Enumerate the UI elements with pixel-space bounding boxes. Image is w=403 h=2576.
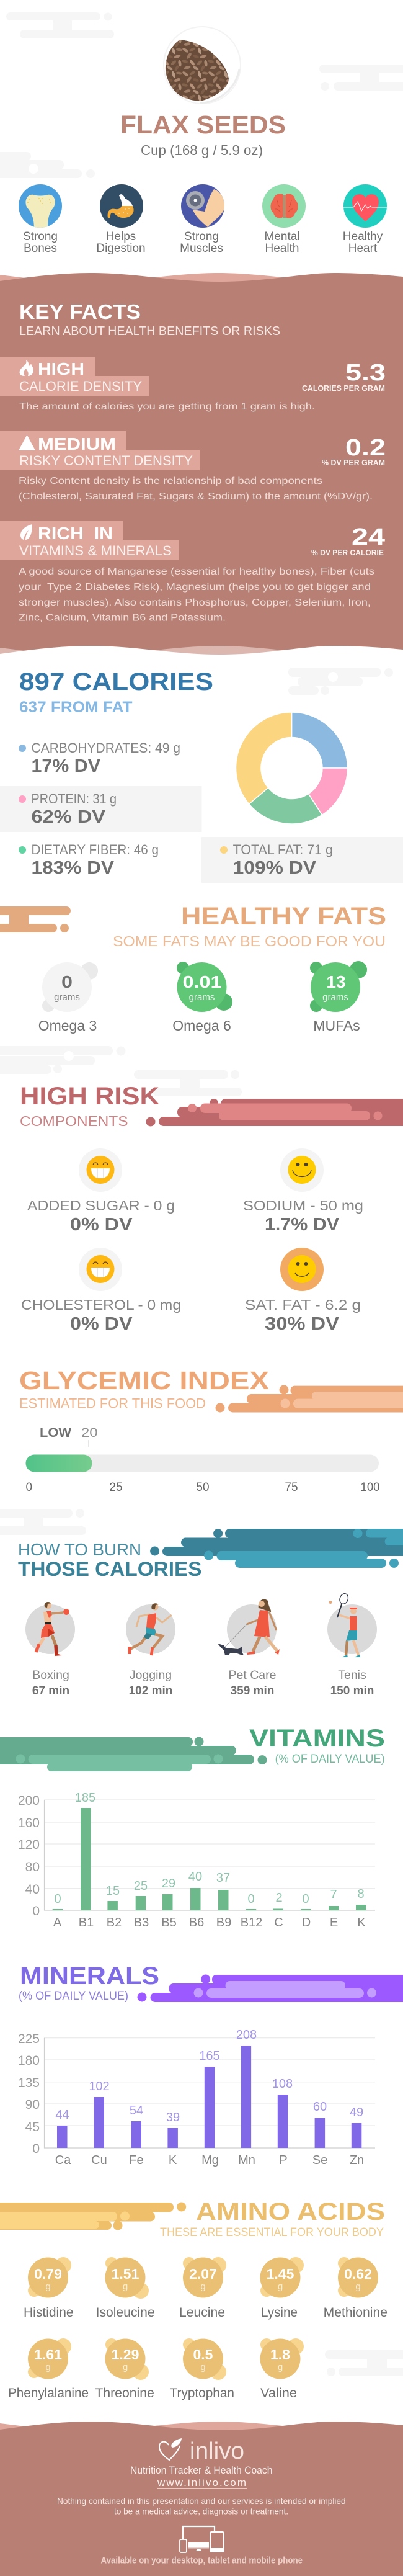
macro: carbohydrates xyxy=(19,740,180,776)
amino: phenylalanine: g xyxy=(45,2362,51,2373)
chart: minerals bar chart: Ca xyxy=(55,2153,71,2167)
chart: vitamins bar chart: C xyxy=(274,1916,283,1930)
chart: minerals bar chart: 0 xyxy=(32,2142,40,2156)
fact: calorie density: HIGH xyxy=(38,359,84,378)
panel: health benefit icons xyxy=(19,184,387,255)
amino: valine: Valine xyxy=(260,2386,297,2400)
amino: lysine: g xyxy=(278,2281,283,2292)
chart: vitamins bar chart: 0 xyxy=(247,1892,255,1906)
chart: vitamins bar chart: 25 xyxy=(134,1879,148,1893)
fact: risky content density: (Cholesterol, Saturated Fat, Sugars & Sodium) to the amount (%DV/gr). xyxy=(19,491,373,502)
amino: threonine: g xyxy=(123,2362,128,2373)
chart: vitamins bar chart: 8 xyxy=(357,1887,365,1901)
chart: vitamins bar chart: B1 xyxy=(79,1916,94,1930)
background cloud: amino xyxy=(325,2350,403,2376)
chart: minerals bar chart xyxy=(18,2028,375,2167)
icon: warning triangle xyxy=(19,435,35,450)
chart: vitamins bar chart: 160 xyxy=(18,1816,40,1830)
subheading: (% OF DAILY VALUE) xyxy=(275,1753,385,1766)
disclaimer: Nothing contained in this presentation and our services is intended or implied xyxy=(57,2496,346,2506)
bubble: omega 3: 0 xyxy=(61,972,73,991)
amino: isoleucine: g xyxy=(123,2281,128,2292)
component: sodium: SODIUM - 50 mg xyxy=(243,1197,363,1214)
fact: risky content density: RISKY CONTENT DENSITY xyxy=(19,453,193,468)
label: helps digestion: Helps xyxy=(106,230,136,243)
activity: tennis xyxy=(327,1593,377,1657)
macro: carbohydrates: 17% DV xyxy=(31,756,101,776)
amino: histidine xyxy=(24,2257,74,2320)
amino: histidine: Histidine xyxy=(24,2305,74,2320)
decoration: amino bars xyxy=(0,2203,186,2230)
chart: vitamins bar chart: 200 xyxy=(18,1794,40,1808)
amino: methionine xyxy=(324,2257,388,2320)
amino: lysine: 1.45 xyxy=(267,2266,294,2282)
icon: flame xyxy=(20,360,33,376)
logo: inlivo xyxy=(159,2438,244,2464)
amino: methionine: 0.62 xyxy=(344,2266,372,2282)
gauge: glycemic scale: 100 xyxy=(361,1481,379,1494)
macro: carbohydrates: CARBOHYDRATES: 49 g xyxy=(31,740,180,756)
label: helps digestion: Digestion xyxy=(96,242,146,255)
fact: rich in vitamins and minerals: 24 xyxy=(352,524,385,550)
panel: key facts xyxy=(0,273,403,655)
background clouds: high risk xyxy=(0,1046,242,1096)
label: healthy heart: Heart xyxy=(348,242,378,255)
label: mental health: Health xyxy=(265,242,299,255)
subtitle: serving size: Cup (168 g / 5.9 oz) xyxy=(141,142,263,158)
amino: isoleucine: 1.51 xyxy=(112,2266,140,2282)
panel: amino acids xyxy=(0,2198,403,2400)
panel: footer xyxy=(0,2422,403,2576)
fact: rich in vitamins and minerals: % DV PER CALORIE xyxy=(311,548,384,557)
fact: rich in vitamins and minerals: A good source of Manganese (essential for healthy bones), Fiber (cuts xyxy=(19,566,374,577)
activity: pet care xyxy=(218,1599,280,1655)
label: healthy heart: Healthy xyxy=(343,230,383,243)
macro: total fat: 109% DV xyxy=(233,858,317,878)
bubble: mufas xyxy=(310,961,367,1034)
chart: vitamins bar chart: 2 xyxy=(275,1891,283,1905)
chart: vitamins bar chart: 40 xyxy=(188,1870,202,1884)
fact: risky content density: 0.2 xyxy=(345,435,386,461)
bubble: mufas: MUFAs xyxy=(313,1017,360,1034)
subheading: LEARN ABOUT HEALTH BENEFITS OR RISKS xyxy=(19,324,280,338)
chart: minerals bar chart: 225 xyxy=(18,2032,40,2046)
label: jogging: Jogging xyxy=(130,1668,172,1682)
macro: dietary fiber xyxy=(19,842,159,878)
bubble: omega 3: Omega 3 xyxy=(38,1017,97,1034)
amino: leucine xyxy=(179,2257,226,2320)
food image: bowl of flax seeds xyxy=(164,27,241,104)
amino: histidine: 0.79 xyxy=(34,2266,62,2282)
chart: vitamins bar chart: B2 xyxy=(107,1916,122,1930)
label: boxing: Boxing xyxy=(32,1668,69,1682)
icon: healthy heart xyxy=(343,184,387,228)
panel: how to burn those calories xyxy=(18,1529,403,1697)
amino: tryptophan: 0.5 xyxy=(193,2346,213,2363)
fact: calorie density: The amount of calories you are getting from 1 gram is high. xyxy=(19,401,315,412)
background clouds: header xyxy=(0,12,403,178)
fact: risky content density: Risky Content density is the relationship of bad components xyxy=(19,476,322,486)
fact: rich in vitamins and minerals: VITAMINS & MINERALS xyxy=(19,543,172,558)
bubble: omega 6: grams xyxy=(189,992,215,1003)
heading: high risk: HIGH RISK xyxy=(20,1083,159,1110)
chart: vitamins bar chart: 185 xyxy=(75,1791,95,1805)
value: jogging minutes: 102 min xyxy=(129,1684,172,1697)
tagline: Nutrition Tracker & Health Coach xyxy=(130,2464,273,2476)
logo: inlivo: inlivo xyxy=(190,2438,244,2464)
icon: digestion xyxy=(100,184,143,228)
chart: minerals bar chart: 39 xyxy=(166,2111,180,2124)
heading: minerals: MINERALS xyxy=(20,1962,159,1990)
chart: vitamins bar chart: B6 xyxy=(189,1916,204,1930)
background cloud: burn xyxy=(0,1509,86,1535)
chart: minerals bar chart: 180 xyxy=(18,2054,40,2068)
macro: dietary fiber: 183% DV xyxy=(31,858,115,878)
chart: vitamins bar chart: B3 xyxy=(134,1916,149,1930)
chart: vitamins bar chart: 29 xyxy=(162,1877,175,1890)
decoration: burn bars xyxy=(150,1529,403,1568)
icon: strong bones xyxy=(19,184,62,228)
amino: lysine: Lysine xyxy=(261,2305,298,2320)
decoration: healthy fats bars xyxy=(0,906,71,932)
label: strong bones: Strong xyxy=(23,230,58,243)
label: strong muscles: Strong xyxy=(184,230,219,243)
chart: vitamins bar chart: 0 xyxy=(32,1904,40,1918)
title: FLAX SEEDS xyxy=(120,110,286,139)
chart: minerals bar chart: Cu xyxy=(91,2153,107,2167)
fact: risky content density xyxy=(0,431,386,502)
label: tennis: Tenis xyxy=(338,1668,366,1682)
chart: minerals bar chart: 60 xyxy=(313,2100,327,2114)
band: protein background xyxy=(0,786,202,832)
chart: vitamins bar chart: B12 xyxy=(241,1916,262,1930)
amino: phenylalanine: Phenylalanine xyxy=(8,2386,89,2400)
panel: high risk components xyxy=(20,1083,403,1334)
panel: glycemic index xyxy=(19,1366,403,1494)
background cloud: calories xyxy=(288,668,393,695)
chart: minerals bar chart: 45 xyxy=(25,2120,40,2134)
component: added sugar: 0% DV xyxy=(70,1215,133,1235)
amino: leucine: Leucine xyxy=(179,2305,225,2320)
component: saturated fat: 30% DV xyxy=(265,1314,340,1334)
chart: macro donut xyxy=(236,712,347,824)
chart: minerals bar chart: 90 xyxy=(25,2098,40,2112)
chart: vitamins bar chart: 0 xyxy=(302,1892,309,1906)
amino: phenylalanine: 1.61 xyxy=(34,2346,62,2363)
chart: vitamins bar chart: 0 xyxy=(54,1892,61,1906)
macro: protein xyxy=(19,791,117,827)
bubble: mufas: grams xyxy=(322,992,348,1003)
subheading: (% OF DAILY VALUE) xyxy=(19,1990,128,2003)
subheading: THESE ARE ESSENTIAL FOR YOUR BODY xyxy=(160,2226,384,2239)
chart: minerals bar chart: Mn xyxy=(238,2153,255,2167)
amino: lysine xyxy=(260,2257,304,2320)
fact: calorie density: 5.3 xyxy=(345,360,386,386)
chart: vitamins bar chart: E xyxy=(330,1916,338,1930)
value: tennis minutes: 150 min xyxy=(330,1684,374,1697)
chart: vitamins bar chart: 37 xyxy=(216,1871,230,1885)
disclaimer: to be a medical advice, diagnosis or treatment. xyxy=(114,2507,288,2516)
amino: valine xyxy=(260,2338,304,2400)
icon: strong muscles xyxy=(181,184,225,228)
panel: minerals xyxy=(18,1962,403,2167)
macro: dietary fiber: DIETARY FIBER: 46 g xyxy=(31,842,159,857)
icon: devices xyxy=(180,2526,224,2552)
heading: amino acids: AMINO ACIDS xyxy=(196,2198,385,2225)
gauge: glycemic scale xyxy=(26,1454,379,1494)
decoration: glycemic bars xyxy=(216,1385,403,1412)
bubble: mufas: 13 xyxy=(326,972,346,991)
amino: leucine: 2.07 xyxy=(189,2266,217,2282)
component: sodium: 1.7% DV xyxy=(265,1215,340,1235)
macro: total fat xyxy=(220,842,333,878)
band: total fat background xyxy=(202,837,403,883)
macro: total fat: TOTAL FAT: 71 g xyxy=(233,842,333,857)
chart: vitamins bar chart: 120 xyxy=(18,1838,40,1852)
bubble: omega 6: Omega 6 xyxy=(172,1017,231,1034)
amino: tryptophan: g xyxy=(200,2362,206,2373)
disclaimer xyxy=(57,2496,346,2516)
component: added sugar: ADDED SUGAR - 0 g xyxy=(27,1197,175,1214)
chart: minerals bar chart: 49 xyxy=(350,2106,363,2119)
label: strong muscles: Muscles xyxy=(180,242,223,255)
macro: protein: PROTEIN: 31 g xyxy=(31,791,117,807)
chart: vitamins bar chart: 7 xyxy=(330,1888,337,1902)
value: boxing minutes: 67 min xyxy=(32,1684,69,1697)
heading: glycemic index: GLYCEMIC INDEX xyxy=(19,1366,269,1395)
amino: leucine: g xyxy=(200,2281,206,2292)
wave: top of key facts xyxy=(0,273,403,292)
label: strong bones: Bones xyxy=(24,242,57,255)
fact: rich in vitamins and minerals xyxy=(0,521,385,623)
website: www.inlivo.com xyxy=(157,2477,246,2489)
chart: minerals bar chart: 54 xyxy=(130,2104,143,2118)
component: cholesterol xyxy=(21,1248,181,1334)
fact: rich in vitamins and minerals: Zinc, Calcium, Vitamin B6 and Potassium. xyxy=(19,613,226,623)
amino: tryptophan xyxy=(170,2338,234,2400)
gauge: glycemic scale: 50 xyxy=(196,1481,210,1494)
fact: rich in vitamins and minerals: stronger muscles). Also contains Phosphorus, Copper, Selenium, Iron, xyxy=(19,597,371,608)
fact: rich in vitamins and minerals: your Type 2 Diabetes Risk), Magnesium (helps you to get bigger and xyxy=(19,582,371,593)
chart: vitamins bar chart: B9 xyxy=(216,1916,231,1930)
chart: minerals bar chart: 208 xyxy=(236,2028,257,2042)
heading: how to burn: HOW TO BURN xyxy=(18,1540,141,1559)
amino: histidine: g xyxy=(45,2281,51,2292)
gauge: glycemic scale: 75 xyxy=(285,1481,298,1494)
wave: footer top xyxy=(0,2422,403,2438)
fact: risky content density: % DV PER GRAM xyxy=(322,458,385,467)
gauge: glycemic scale: 0 xyxy=(26,1481,32,1494)
decoration: vitamins bars xyxy=(0,1737,267,1771)
gauge: glycemic scale: 25 xyxy=(109,1481,123,1494)
amino: isoleucine xyxy=(96,2257,155,2320)
component: cholesterol: CHOLESTEROL - 0 mg xyxy=(21,1297,181,1313)
fact: rich in vitamins and minerals: RICH IN xyxy=(38,524,113,543)
heading: those calories: THOSE CALORIES xyxy=(18,1558,202,1580)
component: sodium xyxy=(243,1148,363,1235)
subheading: calories from fat: 637 FROM FAT xyxy=(19,699,133,716)
decoration: minerals bars xyxy=(138,1974,403,2002)
chart: minerals bar chart: P xyxy=(279,2153,288,2167)
component: added sugar xyxy=(27,1148,175,1235)
bubble: omega 6 xyxy=(172,962,232,1034)
heading: key facts: KEY FACTS xyxy=(19,300,141,323)
amino: tryptophan: Tryptophan xyxy=(170,2386,234,2400)
chart: minerals bar chart: K xyxy=(169,2153,177,2167)
chart: minerals bar chart: 135 xyxy=(18,2076,40,2090)
chart: vitamins bar chart: D xyxy=(302,1916,311,1930)
fact: calorie density xyxy=(0,357,386,412)
chart: minerals bar chart: 108 xyxy=(272,2077,293,2091)
panel: healthy fats xyxy=(0,903,386,1034)
amino: valine: g xyxy=(278,2362,283,2373)
chart: minerals bar chart: Mg xyxy=(202,2153,219,2167)
chart: minerals bar chart: Se xyxy=(312,2153,327,2167)
availability note: Available on your desktop, tablet and mobile phone xyxy=(100,2556,303,2566)
subheading: SOME FATS MAY BE GOOD FOR YOU xyxy=(113,933,386,949)
bubble: omega 3 xyxy=(38,962,98,1034)
rating: low 20: 20 xyxy=(81,1426,98,1440)
decoration: high risk bars xyxy=(146,1099,403,1127)
fact: risky content density: MEDIUM xyxy=(38,434,116,454)
heading: vitamins: VITAMINS xyxy=(249,1725,385,1752)
label: pet care: Pet Care xyxy=(229,1668,276,1682)
icon: leaf xyxy=(20,524,32,540)
bubble: omega 6: 0.01 xyxy=(182,972,222,991)
fact: calorie density: CALORIE DENSITY xyxy=(19,378,142,394)
icon: mental health xyxy=(262,184,306,228)
amino: threonine: Threonine xyxy=(95,2386,154,2400)
chart: vitamins bar chart: K xyxy=(357,1916,366,1930)
chart: minerals bar chart: 44 xyxy=(55,2108,69,2122)
value: pet care minutes: 359 min xyxy=(231,1684,274,1697)
component: saturated fat: SAT. FAT - 6.2 g xyxy=(245,1297,361,1313)
chart: minerals bar chart: 102 xyxy=(89,2080,110,2093)
amino: methionine: Methionine xyxy=(324,2305,388,2320)
chart: vitamins bar chart: 40 xyxy=(25,1882,40,1897)
amino: phenylalanine xyxy=(8,2338,89,2400)
amino: threonine: 1.29 xyxy=(112,2346,139,2363)
rating: low 20: LOW xyxy=(40,1426,71,1440)
heading: calories: 897 CALORIES xyxy=(19,668,213,695)
subheading: components: COMPONENTS xyxy=(20,1113,128,1129)
amino: methionine: g xyxy=(355,2281,361,2292)
chart: vitamins bar chart: B5 xyxy=(161,1916,177,1930)
chart: vitamins bar chart: A xyxy=(53,1916,62,1930)
rating: low 20 xyxy=(40,1426,98,1447)
component: saturated fat xyxy=(245,1248,361,1334)
chart: vitamins bar chart: 80 xyxy=(25,1860,40,1874)
label: mental health: Mental xyxy=(264,230,300,243)
bubble: omega 3: grams xyxy=(54,992,80,1003)
activity: boxing xyxy=(25,1602,75,1656)
wave: bottom of key facts xyxy=(0,646,403,664)
chart: vitamins bar chart xyxy=(18,1791,375,1930)
amino: valine: 1.8 xyxy=(270,2346,290,2363)
amino: isoleucine: Isoleucine xyxy=(96,2305,155,2320)
chart: minerals bar chart: 165 xyxy=(199,2049,220,2063)
amino: threonine xyxy=(95,2338,154,2400)
chart: vitamins bar chart: 15 xyxy=(106,1884,120,1898)
heading: healthy fats: HEALTHY FATS xyxy=(181,903,386,930)
chart: minerals bar chart: Fe xyxy=(129,2153,144,2167)
activity: jogging xyxy=(126,1603,175,1655)
fact: calorie density: CALORIES PER GRAM xyxy=(302,384,385,393)
panel: vitamins xyxy=(0,1725,385,1930)
macro: protein: 62% DV xyxy=(31,807,106,827)
chart: minerals bar chart: Zn xyxy=(350,2153,364,2167)
component: cholesterol: 0% DV xyxy=(70,1314,133,1334)
subheading: ESTIMATED FOR THIS FOOD xyxy=(19,1396,206,1411)
